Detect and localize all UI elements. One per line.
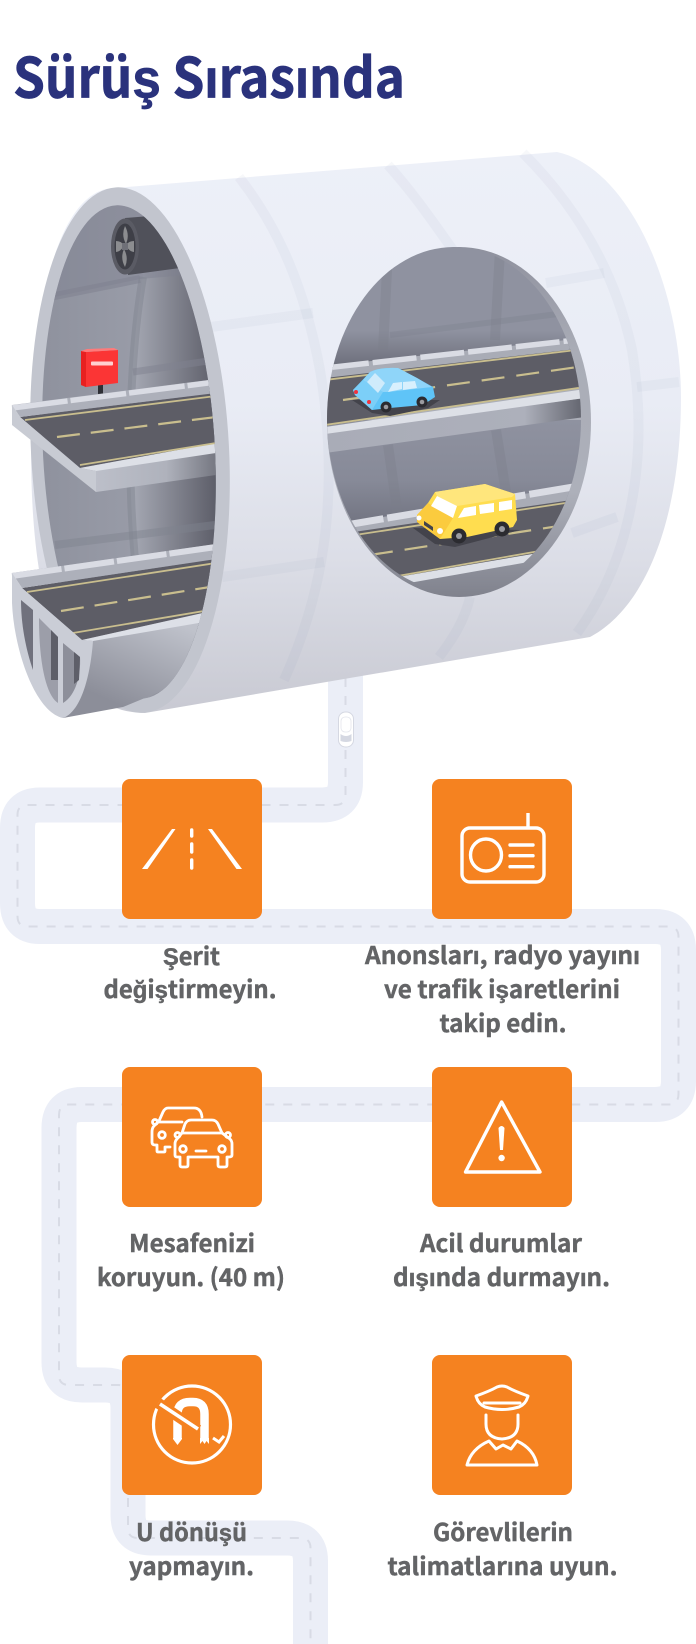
icon box: officer (432, 1355, 572, 1495)
yellow van (413, 484, 520, 547)
lower deck road right (354, 491, 569, 532)
icon: red sign (81, 348, 118, 395)
panel: follow officers (388, 1355, 618, 1582)
front rail lower left (82, 613, 202, 641)
road surface upper left (20, 393, 216, 468)
caption: keep distance: Mesafenizi (129, 1224, 255, 1259)
caption: keep distance (97, 1224, 285, 1293)
right opening crescent (327, 247, 591, 597)
deck side wedge (12, 405, 96, 492)
panel: change lanes (104, 779, 276, 1005)
bowl slots (21, 600, 33, 670)
caption: change lanes: Şerit (163, 937, 220, 972)
caption: change lanes (104, 937, 276, 1005)
upper deck right face (325, 398, 585, 453)
caption: change lanes: değiştirmeyin. (104, 970, 276, 1005)
caption: follow officers (388, 1513, 618, 1582)
tunnel outer body (31, 152, 681, 713)
caption: no U-turn: U dönüşü (136, 1513, 247, 1548)
panel: do not stop (393, 1067, 610, 1293)
tunnel segment bands (211, 153, 679, 680)
back rail upper left (12, 379, 216, 417)
icon box: two cars (122, 1067, 262, 1207)
icon box: radio (432, 779, 572, 919)
caption: no U-turn: yapmayın. (129, 1547, 254, 1582)
caption: do not stop: Acil durumlar (419, 1224, 583, 1259)
caption: keep distance: koruyun. (40 m) (97, 1258, 285, 1293)
caption: radio: ve trafik işaretlerini (384, 970, 620, 1005)
interior ribs right (382, 269, 392, 278)
upper deck left (12, 379, 216, 492)
bowl front (12, 573, 93, 718)
caption: no U-turn (129, 1513, 254, 1582)
U arrow (178, 1402, 204, 1440)
icon box: road lanes (122, 779, 262, 919)
lower deck left (12, 544, 216, 718)
caption: do not stop: dışında durmayın. (393, 1258, 610, 1293)
small white car on road (338, 712, 354, 747)
caption: radio (364, 936, 640, 1039)
icon: ventilation fan (111, 216, 180, 275)
icon box: warning triangle (432, 1067, 572, 1207)
bowl side (63, 618, 200, 718)
front rail upper left (80, 443, 216, 471)
panel: radio (364, 779, 640, 1039)
blue car (352, 368, 440, 416)
icon box: no U-turn (122, 1355, 262, 1495)
upper deck road right (325, 346, 585, 426)
title: Sürüş Sırasında (13, 34, 405, 114)
front opening interior (42, 205, 216, 698)
winding road path (18, 660, 678, 1644)
caption: radio: takip edin. (440, 1004, 566, 1039)
back rail lower left (12, 544, 216, 588)
panel: keep distance (97, 1067, 285, 1293)
caption: follow officers: Görevlilerin (433, 1513, 573, 1548)
caption: follow officers: talimatlarına uyun. (388, 1547, 618, 1582)
caption: radio: Anonsları, radyo yayını (364, 936, 640, 971)
caption: do not stop (393, 1224, 610, 1293)
right opening interior (320, 240, 590, 586)
front opening ring (17, 182, 243, 718)
deck front face (96, 450, 216, 492)
panel: no U-turn (122, 1355, 262, 1582)
road surface lower left (22, 559, 216, 640)
illustration: tunnel cross-section (12, 152, 681, 718)
